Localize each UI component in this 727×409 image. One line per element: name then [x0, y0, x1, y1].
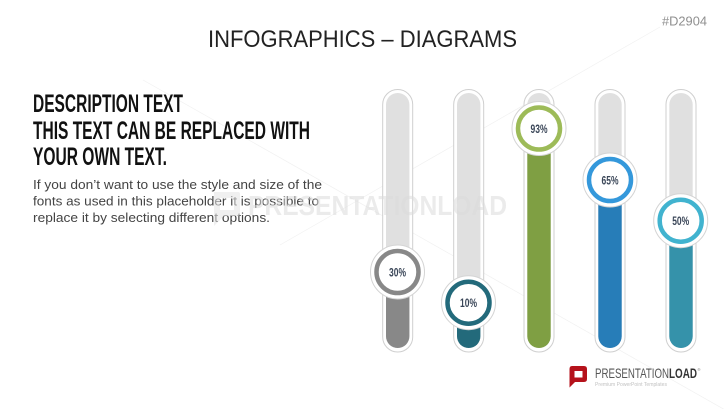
slider: 30% — [370, 90, 424, 352]
slider: 10%: 10% — [460, 296, 477, 310]
heading — [33, 90, 310, 171]
description text: fonts as used in this placeholder it is possible to — [33, 194, 319, 208]
logo wordmark: ® — [698, 367, 700, 372]
description text: replace it by selecting different options. — [33, 210, 270, 225]
description text — [33, 177, 322, 225]
slider: 50%: 50% — [672, 214, 689, 228]
slider: 50% — [654, 90, 708, 352]
title: INFOGRAPHICS – DIAGRAMS — [208, 26, 517, 53]
heading: YOUR OWN TEXT. — [33, 143, 167, 171]
slider: 93% — [512, 90, 566, 352]
logo wordmark: Premium PowerPoint Templates — [595, 382, 667, 388]
logo wordmark: PRESENTATION — [595, 365, 669, 381]
slider: 65%: 65% — [602, 174, 619, 188]
icon: watermark mark — [214, 192, 240, 226]
watermark wordmark: PRESENTATIONLOAD — [248, 190, 507, 221]
slider: 93%: 93% — [530, 122, 548, 136]
icon: logo mark — [570, 366, 587, 388]
slider: 30%: 30% — [389, 266, 406, 280]
slider: 65% — [583, 90, 637, 352]
slide code: #D2904 — [662, 14, 707, 28]
slider: 10% — [442, 90, 496, 352]
logo wordmark — [595, 365, 700, 388]
logo — [570, 365, 700, 388]
heading: DESCRIPTION TEXT — [33, 90, 183, 118]
logo wordmark: LOAD — [669, 365, 697, 381]
watermark — [214, 190, 507, 226]
description text: If you don’t want to use the style and size of the — [33, 177, 322, 192]
heading: THIS TEXT CAN BE REPLACED WITH — [33, 117, 310, 145]
